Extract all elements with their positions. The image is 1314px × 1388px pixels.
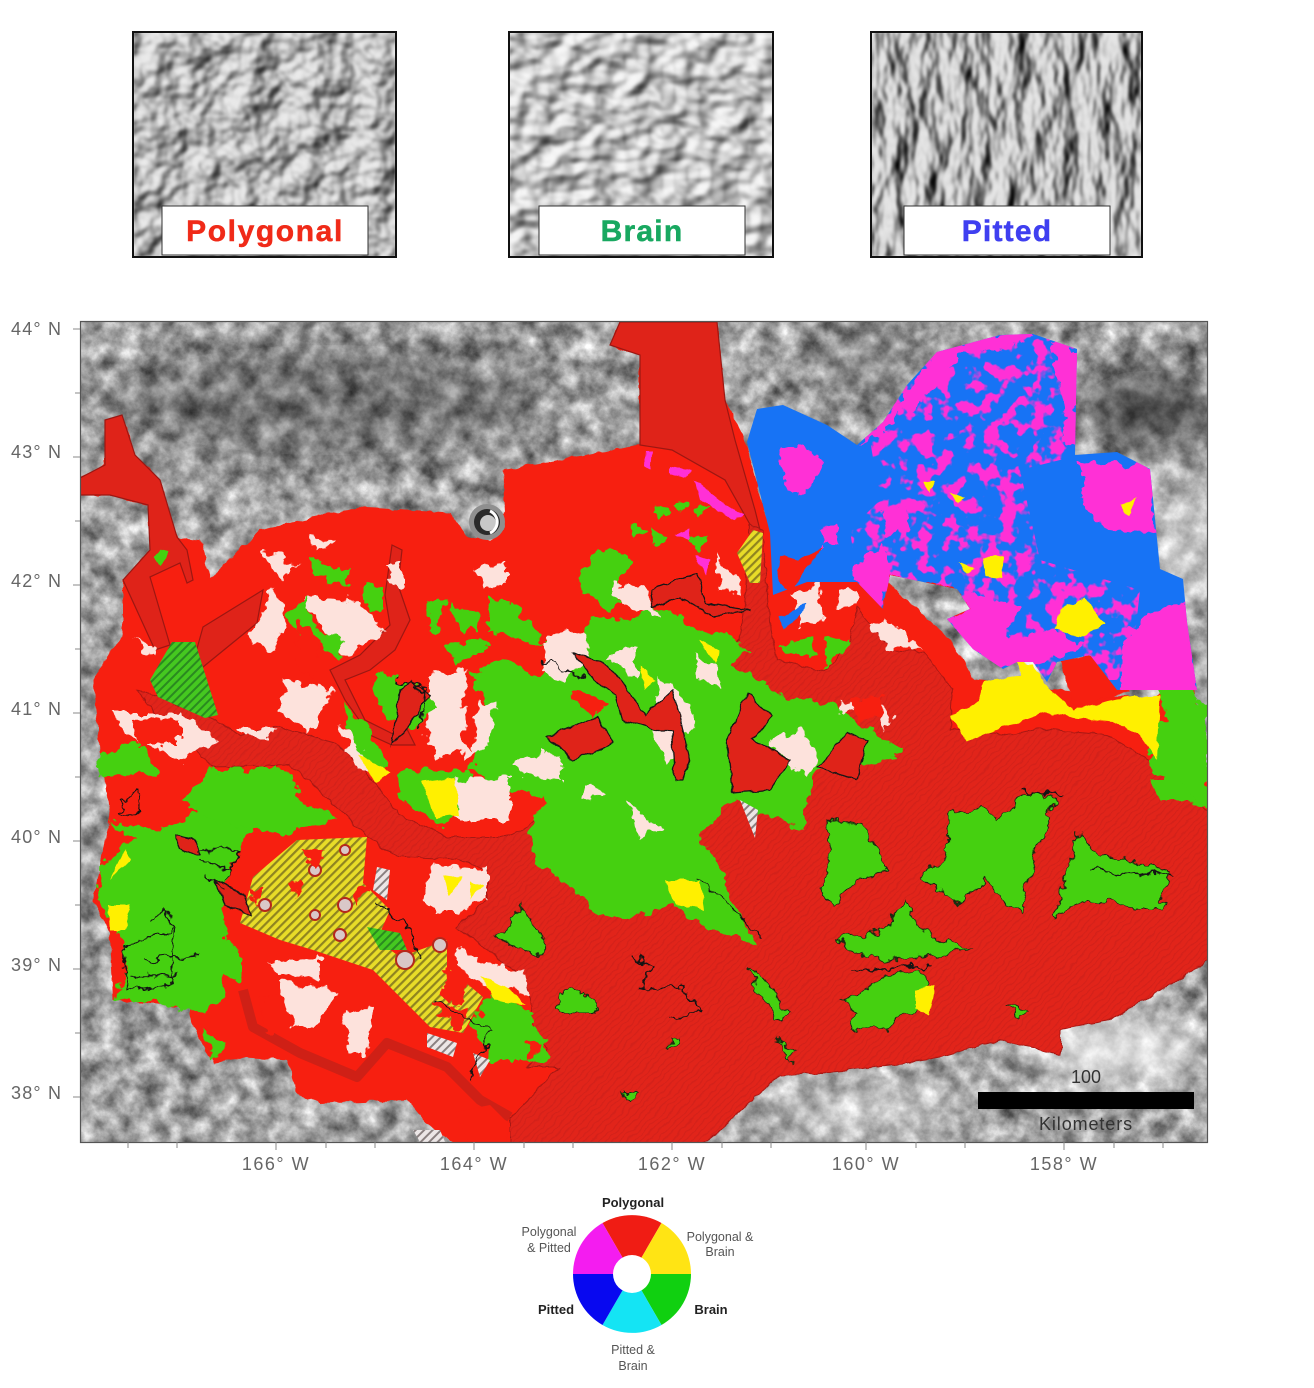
pale pink mixed terrain in red zone <box>113 537 527 1053</box>
yellow patches in blue region <box>923 480 1137 638</box>
legend labels: Polygonal <box>602 1195 664 1210</box>
blue patch in pale terrain <box>780 603 807 630</box>
red bulge beside yellow strip <box>1060 656 1130 697</box>
green islands in lowland <box>494 790 1170 1102</box>
legend labels: & Pitted <box>527 1241 571 1255</box>
bright red fingers into blue <box>778 548 822 595</box>
legend labels: Brain <box>618 1359 648 1373</box>
polygonal and brain hatched zone <box>240 837 483 1033</box>
panel: Brain texture sample <box>509 32 773 257</box>
latitude labels <box>11 319 62 1103</box>
label: Brain <box>539 206 745 255</box>
label: Polygonal <box>162 206 368 255</box>
longitude labels: 164° W <box>440 1154 508 1174</box>
label: Brain: Brain <box>601 215 683 248</box>
legend labels: Pitted & <box>611 1343 656 1357</box>
map base imagery <box>81 322 1220 1142</box>
bright red polygonal terrain <box>80 321 1210 1145</box>
latitude labels: 38° N <box>11 1083 62 1103</box>
longitude labels: 166° W <box>242 1154 310 1174</box>
axis ticks <box>73 329 1163 1150</box>
green brain terrain <box>97 500 1208 1060</box>
dark red lowland terrain <box>137 525 1210 1145</box>
legend labels: Polygonal & <box>687 1230 754 1244</box>
panel: Polygonal texture sample <box>133 32 396 257</box>
latitude labels: 43° N <box>11 442 62 462</box>
hatched gray zones <box>373 800 758 1142</box>
yellow polygonal and brain patches <box>108 640 1160 1015</box>
label: Polygonal: Polygonal <box>186 215 344 248</box>
latitude labels: 40° N <box>11 827 62 847</box>
legend labels: Brain <box>705 1245 735 1259</box>
latitude labels: 42° N <box>11 571 62 591</box>
longitude labels: 158° W <box>1030 1154 1098 1174</box>
legend labels: Pitted <box>538 1302 574 1317</box>
small green specks <box>154 548 1195 800</box>
bright red patch at south edge <box>455 1105 510 1145</box>
scale bar: Kilometers <box>1039 1114 1133 1134</box>
longitude labels <box>242 1154 1098 1174</box>
scale bar <box>978 1067 1194 1134</box>
legend labels: Polygonal <box>522 1225 576 1239</box>
panel: Pitted texture sample <box>871 32 1142 257</box>
magenta specks north of blue <box>644 450 745 575</box>
latitude labels: 39° N <box>11 955 62 975</box>
pale pink patches inside green terrain <box>447 557 920 840</box>
panel: terrain map <box>11 319 1220 1174</box>
label: Pitted: Pitted <box>962 215 1052 248</box>
dark red channel: north <box>610 322 760 530</box>
latitude labels: 44° N <box>11 319 62 339</box>
dark red fingers in green terrain <box>175 573 867 915</box>
crater <box>469 504 505 540</box>
red detail patches in mixed terrain <box>130 620 885 1060</box>
longitude labels: 162° W <box>638 1154 706 1174</box>
black contour linework <box>120 660 1175 1080</box>
longitude labels: 160° W <box>832 1154 900 1174</box>
dark red channel: northwest <box>80 415 193 650</box>
map frame <box>80 322 1208 1142</box>
dark red band south <box>243 990 510 1117</box>
legend colour wheel <box>522 1195 754 1373</box>
legend labels: Brain <box>694 1302 728 1317</box>
scale bar: 100 <box>1071 1067 1101 1087</box>
label: Pitted <box>904 206 1110 255</box>
latitude labels: 41° N <box>11 699 62 719</box>
legend labels <box>522 1195 754 1373</box>
dark red ridges west <box>193 545 415 745</box>
hatched green zones <box>150 530 763 950</box>
pitted and polygonal region <box>740 330 1210 700</box>
